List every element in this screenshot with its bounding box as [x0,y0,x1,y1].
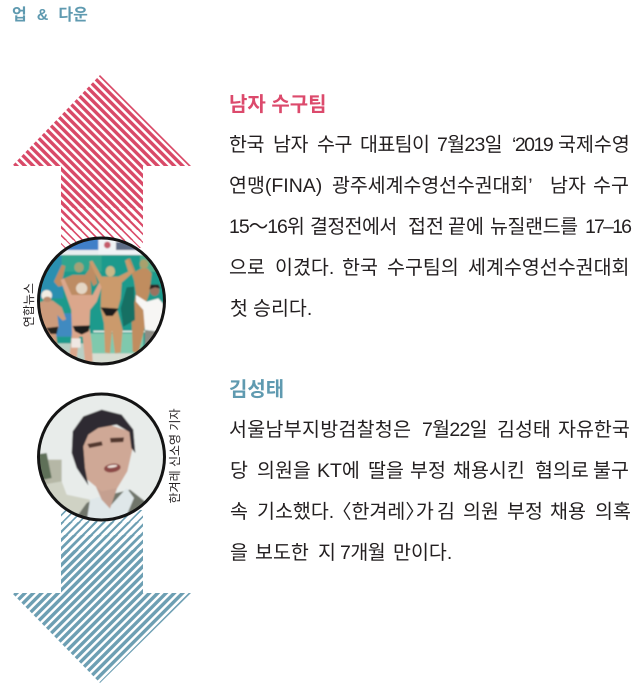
text block: Kim Seong-tae: 채용 [550,501,586,523]
text block: Kim Seong-tae: 을 [230,542,248,564]
text block: Kim Seong-tae: 7개월 [340,542,385,564]
text block: water polo: 17–16 [585,216,630,238]
brows and eyes [87,441,103,448]
text block: water polo: 15～16위 [229,216,304,238]
text block: Kim Seong-tae: 김 [437,501,455,523]
text block: water polo: 수구팀의 [387,257,459,279]
mouth [103,463,121,473]
text block: Kim Seong-tae: 부정 [507,501,543,523]
text block: Kim Seong-tae [229,419,631,564]
text block: water polo: 대표팀이 [360,134,429,156]
text block: Kim Seong-tae: 〈한겨레〉가 [332,501,434,523]
text block: water polo: 첫 [230,298,248,320]
section label: up and down: 업 & 다운 [12,7,88,24]
down arrow [13,510,191,683]
text block: Kim Seong-tae: 만이다. [393,542,452,564]
hair [72,410,135,485]
front player left [61,278,104,363]
text block: water polo: 수구 [317,134,352,156]
text block: Kim Seong-tae: 속 [230,501,248,523]
text block: Kim Seong-tae: 당 [230,460,248,482]
text block: Kim Seong-tae: 7월22일 [422,419,487,441]
shirt [87,488,134,521]
text block: water polo: 승리다. [253,298,312,320]
front player center [89,259,134,353]
text block: water polo: 끝에 [448,216,484,238]
suit [78,489,145,517]
text block: water polo: 결정전에서 [310,216,397,238]
text block: Kim Seong-tae: 딸을 [368,460,404,482]
back player right [127,258,152,353]
text block: water polo: 한국 [229,134,264,156]
text block: Kim Seong-tae: 혐의로 [535,460,589,482]
white shirt man [136,295,164,332]
text block: Kim Seong-tae: 의원 [463,501,499,523]
text block: water polo: 남자 [273,134,308,156]
text block: Kim Seong-tae: 지 [318,542,336,564]
text block: water polo: 이겼다. [275,257,334,279]
text block: Kim Seong-tae: 의혹 [595,501,631,523]
text block: water polo: 한국 [342,257,378,279]
text block: Kim Seong-tae: 자유한국 [558,419,630,441]
heading: men's water polo team: 남자 수구팀 [229,94,327,116]
left player [39,301,66,345]
text block: water polo: 으로 [229,257,265,279]
text block: Kim Seong-tae: 채용시킨 [453,460,525,482]
neck [96,486,118,509]
arrows and photos [13,75,191,683]
text block: water polo: 7월23일 [437,134,502,156]
text block: water polo: ‘2019 [512,134,552,156]
text block: Kim Seong-tae: 김성태 [497,419,551,441]
heading: Kim Seong-tae: 김성태 [229,379,284,401]
text block: Kim Seong-tae: 불구 [593,460,629,482]
text block: Kim Seong-tae: KT에 [317,460,360,482]
text block: water polo: 광주세계수영선수권대회’ [332,175,532,197]
text block: water polo: 세계수영선수권대회 [468,257,629,279]
photo: men's water polo team [33,233,170,367]
text block: water polo: 연맹(FINA) [229,175,322,197]
photo credit: Hankyoreh reporter: 한겨레 신소영 기자 [168,408,182,504]
text block: water polo [229,134,632,320]
text block: Kim Seong-tae: 부정 [410,460,446,482]
text block: water polo: 수구 [593,175,629,197]
green figure [121,287,135,327]
text block: water polo: 접전 [408,216,444,238]
text block: Kim Seong-tae: 서울남부지방검찰청은 [229,419,411,441]
text block: Kim Seong-tae: 의원을 [257,460,311,482]
text block: water polo: 국제수영 [558,134,630,156]
text block: water polo: 뉴질랜드를 [490,216,578,238]
up arrow [13,75,191,248]
text block: Kim Seong-tae: 기소했다. [257,501,334,523]
face [80,425,133,491]
text block: Kim Seong-tae: 보도한 [255,542,309,564]
back player left [53,262,98,296]
photo: Kim Seong-tae [33,391,170,525]
photo credit: Yonhap: 연합뉴스 [22,283,36,327]
text block: water polo: 남자 [550,175,586,197]
